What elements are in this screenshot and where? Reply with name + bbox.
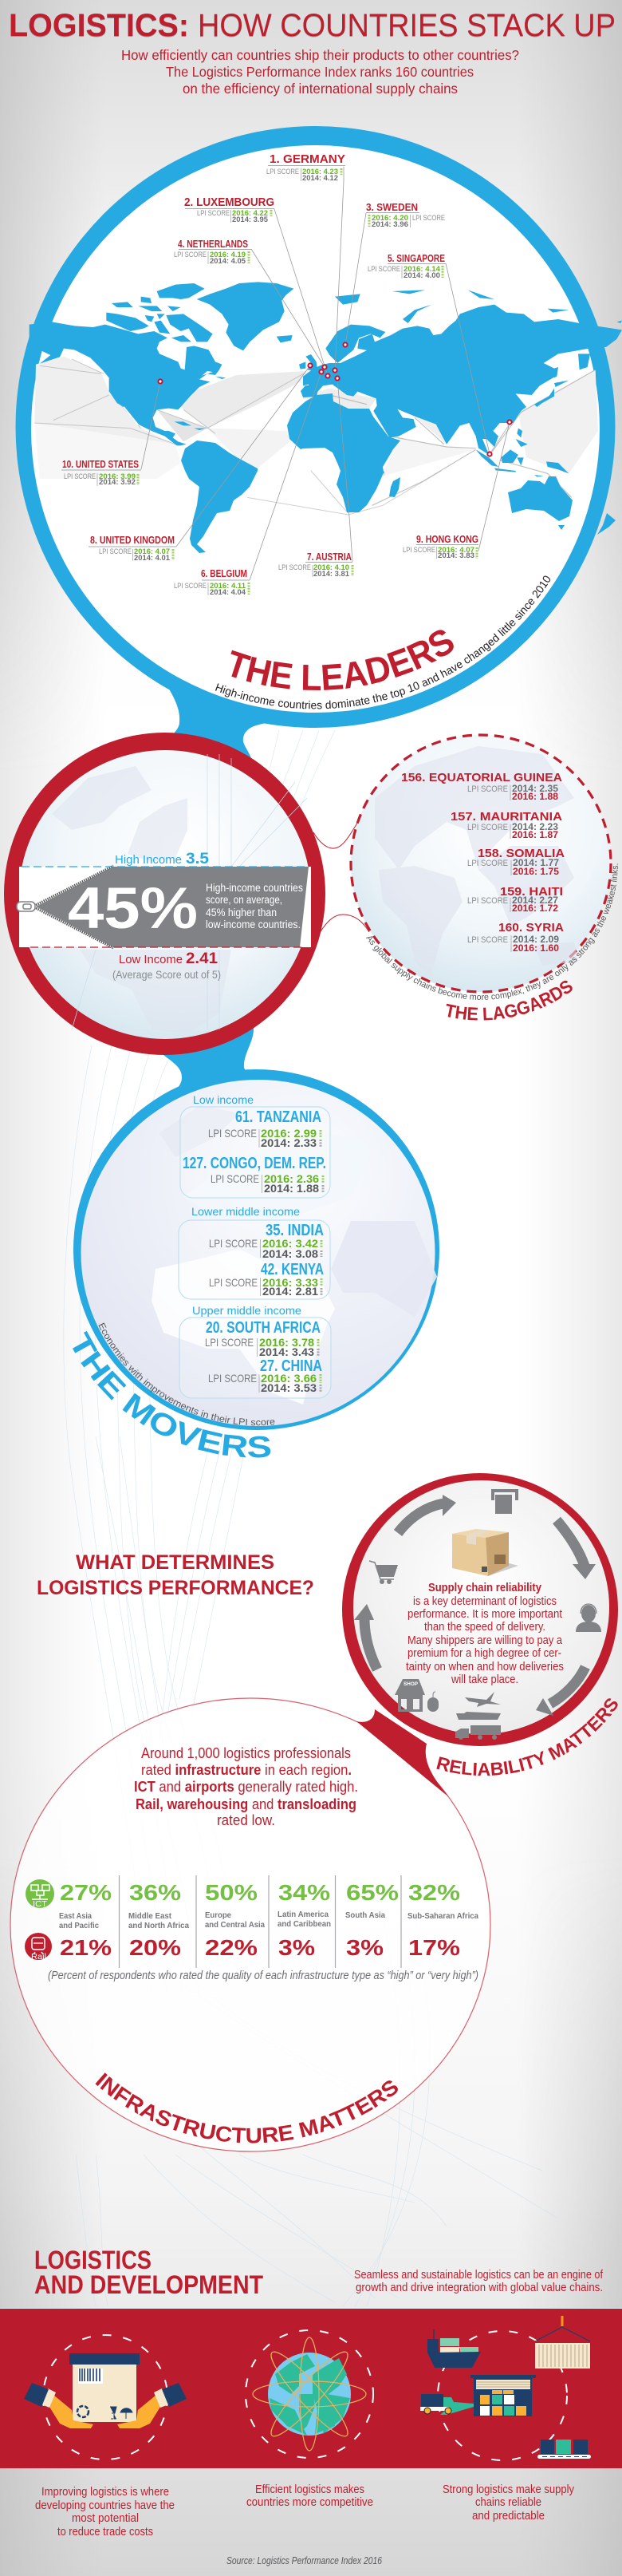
label: 5 Singapore: 2014: 4.00 (404, 271, 440, 280)
subtitle: The Logistics Performance Index ranks 160 countries (166, 64, 474, 80)
row: 157 Mauritania: LPI SCORE (467, 823, 508, 832)
arrow heads (354, 1495, 596, 1716)
column: Europe and Central Asia: 50% (205, 1880, 258, 1905)
heading: low income: Low income (193, 1093, 254, 1106)
Cuba (174, 421, 191, 425)
source: Source: Logistics Performance Index 2016 (226, 2554, 383, 2566)
high income label (115, 851, 209, 867)
label: 7 Austria: LPI SCORE (278, 563, 311, 572)
icon: mouse (427, 1692, 439, 1712)
row: Tanzania: 61. TANZANIA (235, 1108, 321, 1126)
row: India: 2016: 3.42 (262, 1237, 318, 1250)
panel: infrastructure matters (10, 1697, 491, 2152)
row: 159 Haiti: 159. HAITI (500, 885, 563, 899)
caption: right: chains reliable (475, 2495, 541, 2509)
low income label: Low Income (119, 953, 183, 966)
row: Congo: 2016: 2.36 (264, 1172, 319, 1185)
heading: reliability matters: RELIABILITY MATTERS (436, 1698, 618, 1776)
label: 9 Hong Kong: 9. HONG KONG (416, 534, 478, 545)
dashed globe (351, 735, 611, 992)
New Guinea (546, 461, 569, 473)
column: East Asia and Pacific (59, 1880, 112, 1960)
label: 9 Hong Kong (403, 534, 478, 560)
Greenland (197, 282, 293, 350)
blue ring (16, 126, 616, 728)
Tasmania (558, 525, 565, 530)
label: 9 Hong Kong: 2016: 4.07 (438, 546, 474, 555)
row: 156 Equatorial Guinea: 2016: 1.88 (512, 792, 559, 802)
box: lower middle income (179, 1220, 330, 1299)
label: 7 Austria: 7. AUSTRIA (307, 551, 352, 563)
icon: parcel box (452, 1529, 518, 1576)
Scandinavia (325, 325, 385, 363)
faint map (52, 766, 231, 1033)
heading: the laggards: THE LAGGARDS (447, 980, 573, 1020)
explanation: High-income countries (206, 882, 303, 894)
row: Tanzania (208, 1108, 321, 1149)
row: 160 Syria: 2014: 2.09 (513, 935, 559, 945)
explanation (206, 882, 303, 930)
heading: what determines logistics performance (37, 1551, 314, 1599)
caption: right (443, 2483, 574, 2523)
label: 10 United States: 2016: 3.99 (99, 472, 136, 481)
Severnaya Zemlya (468, 290, 494, 299)
heading: infrastructure matters: INFRASTRUCTURE MATTERS (96, 2072, 398, 2143)
row: 160 Syria: 160. SYRIA (498, 921, 564, 934)
world map (30, 282, 622, 553)
caption: center: Efficient logistics makes (255, 2483, 364, 2496)
label: 1 Germany (266, 152, 345, 183)
label: 9 Hong Kong: LPI SCORE (403, 546, 435, 555)
North America (30, 322, 222, 445)
label: 2 Luxembourg (184, 196, 274, 224)
Australia (508, 476, 573, 521)
icon: shop (395, 1679, 425, 1712)
row: South Africa: 2016: 3.78 (259, 1336, 314, 1349)
column: Middle East and North Africa: Middle East (128, 1912, 172, 1921)
Sulawesi (517, 457, 524, 465)
icon: plane (465, 1692, 501, 1707)
label: 5 Singapore (368, 253, 446, 280)
white map disc (31, 145, 600, 713)
row: 159 Haiti: 2014: 2.27 (512, 896, 558, 906)
row: India: LPI SCORE (209, 1237, 258, 1250)
globe (81, 1080, 435, 1426)
South America (181, 441, 258, 553)
label: 1 Germany: LPI SCORE (266, 168, 299, 176)
dashed red line (30, 946, 301, 948)
Iceland (277, 335, 293, 342)
intro text (134, 1745, 358, 1828)
icon: ICT: ICT (33, 1900, 47, 1909)
caption: movers: Economies with improvements in their LPI score (99, 1323, 274, 1425)
row: 159 Haiti (467, 885, 563, 914)
caption: left: Improving logistics is where (41, 2485, 169, 2499)
connector curves (313, 818, 360, 848)
reliability text: is a key determinant of logistics (413, 1594, 557, 1608)
icon: ship (456, 1712, 501, 1720)
label: 1 Germany: 1. GERMANY (270, 152, 345, 166)
label: 3 Sweden: 2014: 3.96 (372, 220, 408, 229)
caption: right: Strong logistics make supply (443, 2483, 574, 2496)
note: average score: (Average Score out of 5) (112, 968, 221, 981)
label: 2 Luxembourg: 2016: 4.22 (232, 209, 268, 218)
row: 156 Equatorial Guinea: 2014: 2.35 (512, 784, 559, 794)
caption: left: most potential (72, 2511, 139, 2525)
row: Kenya: 42. KENYA (261, 1261, 324, 1278)
explanation: score, on average, (206, 894, 282, 906)
label: 10 United States: LPI SCORE (64, 472, 96, 481)
caption: right: and predictable (472, 2509, 545, 2523)
reliability text: Supply chain reliability (428, 1581, 542, 1594)
caption: leaders: High-income countries dominate the top 10 and have changed little since 2010 (215, 576, 550, 709)
icon: hanging container (535, 2316, 590, 2369)
caption: left: to reduce trade costs (57, 2525, 153, 2538)
row: 157 Mauritania: 2014: 2.23 (512, 823, 558, 832)
row: 160 Syria: LPI SCORE (467, 935, 508, 945)
inner disc (353, 1480, 609, 1734)
row: South Africa: 20. SOUTH AFRICA (206, 1319, 321, 1337)
row: China: 27. CHINA (260, 1357, 322, 1375)
row: 156 Equatorial Guinea (401, 771, 562, 802)
high income label: 3.5 (186, 851, 209, 867)
reliability text: tainty on when and how deliveries (406, 1660, 564, 1673)
reliability text: than the speed of delivery. (424, 1620, 545, 1634)
label: 8 United Kingdom: 2014: 4.01 (134, 554, 171, 563)
icon: hands with parcel (24, 2335, 187, 2459)
column: Sub-Saharan Africa: Sub-Saharan Africa (407, 1912, 478, 1921)
label: 6 Belgium: 6. BELGIUM (201, 568, 247, 579)
panel: the movers (73, 1069, 439, 1457)
Borneo (501, 449, 518, 463)
label: 8 United Kingdom (89, 535, 176, 563)
subtitle: How efficiently can countries ship their products to other countries? (121, 47, 519, 63)
icon: ATM card (491, 1489, 518, 1514)
row: South Africa: LPI SCORE (205, 1336, 254, 1349)
column: East Asia and Pacific: East Asia (59, 1912, 92, 1921)
faint map (375, 746, 578, 978)
connector: blue neck between circles (163, 686, 299, 1100)
icon: truck (455, 1725, 501, 1740)
column: Europe and Central Asia: Europe (205, 1911, 231, 1920)
label: 4 Netherlands (174, 239, 251, 266)
row: Kenya: 2014: 2.81 (262, 1285, 318, 1298)
row: 159 Haiti: LPI SCORE (467, 896, 508, 906)
faint map (152, 1105, 437, 1405)
grey zipper panel (36, 867, 309, 947)
label: 1 Germany: 2016: 4.23 (302, 168, 338, 176)
label: 3 Sweden: 2016: 4.20 (372, 214, 408, 223)
blue ring (73, 1069, 439, 1430)
column: Latin America and Caribbean: 3% (278, 1935, 315, 1960)
label: 7 Austria: 2016: 4.10 (313, 563, 349, 572)
row: Congo (183, 1155, 326, 1195)
heading: lower middle income: Lower middle income (191, 1205, 300, 1218)
Iberia (301, 385, 319, 397)
icon: cart (369, 1561, 398, 1584)
label: 6 Belgium: 2014: 4.04 (210, 588, 246, 597)
row: 157 Mauritania: 157. MAURITANIA (451, 810, 562, 824)
label: 3 Sweden: LPI SCORE (412, 214, 445, 223)
label: 2 Luxembourg: LPI SCORE (197, 209, 230, 218)
red ring (342, 1473, 618, 1746)
inner globe (19, 750, 311, 1039)
Java (494, 468, 516, 472)
label: 8 United Kingdom: 8. UNITED KINGDOM (90, 535, 175, 546)
row: India: 35. INDIA (266, 1222, 324, 1239)
Canadian Arctic islands (106, 313, 149, 331)
column: Latin America and Caribbean (278, 1880, 331, 1960)
high income label: High Income (115, 853, 182, 867)
column: South Asia: South Asia (345, 1911, 385, 1920)
panel: reliability matters (342, 1473, 618, 1797)
subtitle (121, 47, 519, 97)
box: upper middle income (179, 1318, 331, 1398)
row: Congo: 2014: 1.88 (264, 1182, 319, 1195)
column: East Asia and Pacific: 21% (60, 1935, 112, 1960)
column: Latin America and Caribbean: and Caribbean (278, 1920, 331, 1929)
row: India: 2014: 3.08 (262, 1247, 318, 1260)
dashed blue line (22, 866, 307, 867)
caption: left (35, 2485, 175, 2538)
icon: Rail (25, 1933, 52, 1962)
heading: logistics and development: AND DEVELOPMENT (34, 2270, 263, 2299)
low income label (119, 950, 218, 967)
column: Sub-Saharan Africa (407, 1880, 478, 1960)
row: Kenya: LPI SCORE (209, 1276, 258, 1289)
reliability text: Many shippers are willing to pay a (407, 1634, 563, 1647)
label: 6 Belgium: 2016: 4.11 (210, 582, 246, 591)
icon: customer service agent (576, 1604, 601, 1632)
heading: logistics and development (34, 2246, 263, 2299)
white band (19, 867, 311, 947)
reliability text (406, 1581, 564, 1686)
intro text: ICT and airports generally rated high. (134, 1779, 358, 1795)
row: Kenya (209, 1261, 324, 1298)
column: Sub-Saharan Africa: 17% (408, 1935, 460, 1960)
Sakhalin (554, 367, 558, 377)
label: 7 Austria: 2014: 3.81 (313, 570, 350, 579)
connector tail (356, 1709, 449, 1797)
label: 4 Netherlands: 2016: 4.19 (210, 251, 246, 259)
title (9, 8, 616, 43)
row: Kenya: 2016: 3.33 (262, 1276, 318, 1289)
outline circle (10, 1698, 490, 2151)
column: East Asia and Pacific: and Pacific (59, 1922, 99, 1930)
reliability text: premium for a high degree of cer- (407, 1646, 561, 1660)
label: 8 United Kingdom: 2016: 4.07 (134, 547, 170, 556)
label: 5 Singapore: 2016: 4.14 (404, 265, 441, 274)
column: Latin America and Caribbean: 34% (278, 1880, 330, 1905)
column dividers (120, 1875, 401, 1968)
panel: red development band (0, 2308, 622, 2468)
label: 8 United Kingdom: LPI SCORE (99, 547, 132, 556)
low income label: 2.41 (186, 950, 218, 967)
heading: logistics and development: LOGISTICS (34, 2246, 152, 2274)
row: 158 Somalia: LPI SCORE (467, 859, 508, 868)
label: 4 Netherlands: LPI SCORE (174, 251, 207, 259)
row: India (209, 1222, 324, 1260)
Philippines (517, 429, 522, 437)
column: Middle East and North Africa: 36% (129, 1880, 181, 1905)
column: Middle East and North Africa (128, 1880, 189, 1960)
subtitle: on the efficiency of international supply chains (183, 81, 458, 97)
explanation: low-income countries. (206, 919, 301, 930)
label: 9 Hong Kong: 2014: 3.83 (438, 551, 474, 560)
panel: the laggards (313, 733, 619, 1020)
leader lines (141, 167, 510, 580)
row: Tanzania: 2014: 2.33 (261, 1136, 317, 1149)
intro text: rated low. (217, 1812, 275, 1828)
Africa (287, 393, 400, 512)
column: East Asia and Pacific: 27% (60, 1880, 112, 1905)
Sumatra (476, 449, 498, 467)
label: 6 Belgium: LPI SCORE (174, 582, 207, 591)
caption: laggards: As global supply chains become more complex, they are only as strong as the weakest links. (366, 863, 619, 1000)
Hispaniola (194, 429, 206, 430)
Novaya Zemlya (403, 305, 432, 323)
row: Congo: LPI SCORE (211, 1172, 259, 1185)
shipping lanes (34, 357, 598, 515)
label: 1 Germany: 2014: 4.12 (302, 174, 338, 183)
icon: container ship (427, 2329, 481, 2368)
row: 158 Somalia (467, 847, 565, 877)
Kamchatka (578, 354, 590, 369)
Great Britain (305, 354, 317, 371)
heading: upper middle income: Upper middle income (192, 1304, 301, 1317)
Eurasia (303, 305, 622, 455)
icon: conveyor belt (537, 2440, 591, 2459)
caption: center (246, 2483, 373, 2509)
icon: ICT (26, 1879, 54, 1909)
heading: the movers: THE MOVERS (73, 1331, 271, 1457)
row: China: 2014: 3.53 (261, 1381, 317, 1394)
row: 159 Haiti: 2016: 1.72 (512, 904, 558, 914)
label: 7 Austria (278, 551, 352, 579)
icon: warehouse (470, 2375, 536, 2416)
Ireland (299, 362, 305, 369)
location markers (158, 342, 512, 456)
row: South Africa: 2014: 3.43 (259, 1345, 314, 1358)
row: 157 Mauritania: 2016: 1.87 (512, 831, 558, 840)
label: 3 Sweden: 3. SWEDEN (366, 202, 418, 213)
explanation: 45% higher than (206, 907, 277, 919)
label: 3 Sweden (366, 202, 445, 229)
column: Middle East and North Africa: 20% (129, 1935, 181, 1960)
Japan (534, 389, 554, 407)
New Siberian Islands (548, 309, 569, 313)
intro text: rated infrastructure in each region. (141, 1762, 352, 1778)
panel: income gap (4, 733, 325, 1055)
intro text: Around 1,000 logistics professionals (141, 1745, 351, 1761)
intro text: Rail, warehousing and transloading (136, 1796, 356, 1812)
row: 156 Equatorial Guinea: LPI SCORE (467, 784, 508, 794)
reliability text: will take place. (451, 1673, 518, 1686)
icon: globe with orbits (246, 2330, 373, 2458)
45 percent: 45% (68, 876, 198, 941)
row: 158 Somalia: 158. SOMALIA (478, 847, 565, 860)
column: South Asia: 3% (346, 1935, 384, 1960)
column: Europe and Central Asia: and Central Asia (205, 1921, 265, 1930)
label: 2 Luxembourg: 2014: 3.95 (232, 215, 269, 224)
label: 10 United States: 2014: 3.92 (99, 478, 136, 487)
icon: Rail: Rail (31, 1953, 46, 1962)
title: LOGISTICS: (9, 8, 189, 43)
New Zealand (597, 513, 616, 535)
row: Tanzania: LPI SCORE (208, 1127, 257, 1140)
cycle arrows (364, 1503, 585, 1704)
heading: what determines logistics performance: WHAT DETERMINES (76, 1551, 274, 1574)
label: 5 Singapore: 5. SINGAPORE (388, 253, 445, 264)
column: South Asia: 65% (346, 1880, 399, 1905)
note: percent of respondents: (Percent of respondents who rated the quality of each infrastructure type as “high” or “very high”) (48, 1969, 478, 1982)
reliability text: performance. It is more important (407, 1607, 563, 1621)
column: South Asia (345, 1880, 399, 1960)
icon: truck (420, 2394, 474, 2415)
row: 160 Syria (467, 921, 564, 954)
label: 10 United States: 10. UNITED STATES (62, 459, 139, 470)
zipper teeth (36, 866, 113, 948)
row: 157 Mauritania (451, 810, 562, 840)
zipper pull (17, 902, 35, 911)
row: South Africa (205, 1319, 321, 1358)
Svalbard (335, 294, 360, 305)
column: Middle East and North Africa: and North Africa (128, 1922, 189, 1930)
development intro (354, 2268, 604, 2294)
row: 158 Somalia: 2016: 1.75 (513, 867, 560, 877)
label: 10 United States (61, 459, 141, 487)
box: low income (180, 1107, 330, 1198)
row: 160 Syria: 2016: 1.60 (513, 944, 559, 954)
heading: what determines logistics performance: LOGISTICS PERFORMANCE? (37, 1577, 314, 1599)
row: China: 2016: 3.66 (261, 1372, 317, 1385)
Newfoundland (198, 369, 219, 381)
row: 158 Somalia: 2014: 1.77 (513, 859, 559, 868)
label: 4 Netherlands: 2014: 4.05 (210, 257, 246, 266)
label: 4 Netherlands: 4. NETHERLANDS (178, 239, 248, 250)
Madagascar (389, 477, 400, 497)
row: China (208, 1357, 322, 1394)
panel: the leaders (16, 126, 622, 728)
caption: center: countries more competitive (246, 2495, 373, 2509)
label: 6 Belgium (174, 568, 250, 597)
row: 156 Equatorial Guinea: 156. EQUATORIAL GUINEA (401, 771, 562, 784)
Franz Josef Land (392, 290, 425, 294)
icon: shop: SHOP (404, 1681, 419, 1687)
column: Europe and Central Asia: 22% (205, 1935, 258, 1960)
column: Latin America and Caribbean: Latin America (278, 1910, 329, 1919)
red ring (4, 733, 325, 1055)
row: Tanzania: 2016: 2.99 (261, 1127, 317, 1140)
column: Sub-Saharan Africa: 32% (408, 1880, 460, 1905)
caption: left: developing countries have the (35, 2499, 175, 2512)
row: China: LPI SCORE (208, 1372, 257, 1385)
row: Congo: 127. CONGO, DEM. REP. (183, 1155, 326, 1172)
heading: the leaders: THE LEADERS (231, 630, 454, 690)
label: 5 Singapore: LPI SCORE (368, 265, 400, 274)
icon: transport chain (420, 2316, 591, 2460)
label: 2 Luxembourg: 2. LUXEMBOURG (184, 196, 274, 209)
column: Europe and Central Asia (205, 1880, 265, 1960)
